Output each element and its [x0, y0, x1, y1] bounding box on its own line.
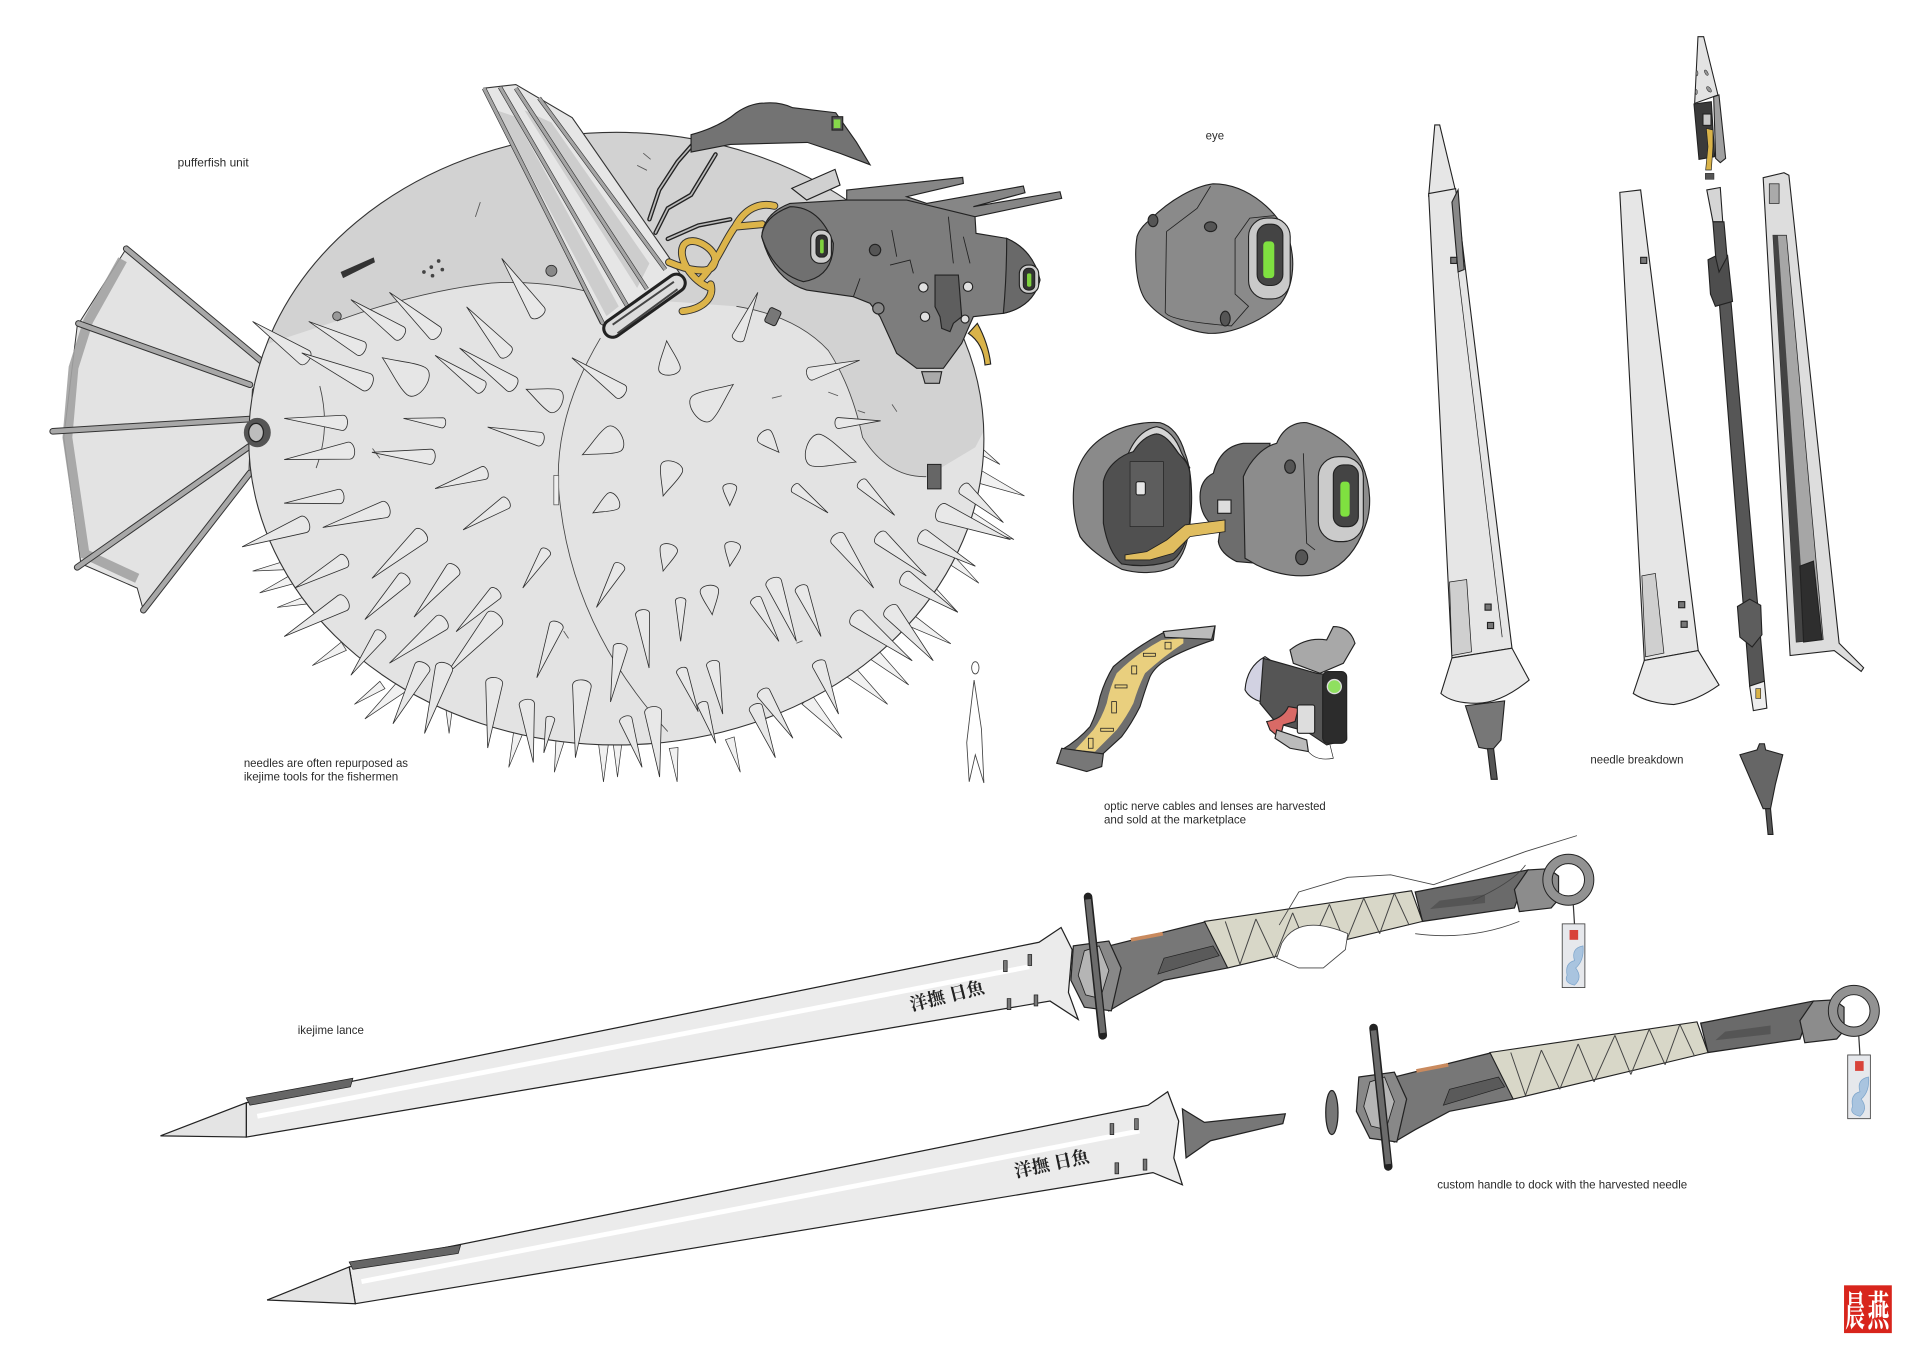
flex cable — [1057, 626, 1215, 772]
needle tip — [1695, 37, 1718, 103]
blade inscription: 洋撫 日魚 — [908, 977, 987, 1015]
main housing — [762, 200, 1040, 368]
lance handle assembled — [1071, 859, 1589, 1035]
gun barrels — [847, 177, 1062, 257]
label: pufferfish unit: pufferfish unit — [178, 158, 250, 170]
scale figure — [967, 662, 984, 783]
rim spikes behind body — [252, 450, 1027, 782]
second blade inscription: 洋撫 日魚 — [1012, 1146, 1092, 1181]
lens recess — [1257, 224, 1283, 285]
connector — [1465, 701, 1505, 750]
yellow cable — [1706, 128, 1713, 170]
white battery — [1297, 705, 1315, 733]
back housing — [1200, 443, 1270, 563]
lower yellow cable — [968, 323, 991, 365]
fish body — [248, 132, 984, 746]
wrap — [1204, 891, 1423, 968]
interior hole — [1136, 482, 1145, 495]
sheath dark strip — [1773, 235, 1806, 642]
casing — [1694, 102, 1715, 159]
fingers — [1277, 925, 1348, 968]
hand outline — [1277, 836, 1577, 968]
label: needle breakdown: needle breakdown — [1590, 754, 1684, 766]
needle tip assembly — [1694, 37, 1726, 179]
lower panel — [1449, 580, 1472, 656]
top connector — [1163, 626, 1215, 639]
cables — [649, 142, 774, 311]
left lens frame — [811, 230, 831, 263]
ring — [1548, 859, 1589, 901]
eye detail — [1136, 184, 1293, 333]
orange mark — [1131, 934, 1163, 940]
rear shaft — [1415, 870, 1528, 921]
blade highlight — [257, 967, 1029, 1116]
tip marks — [1695, 69, 1712, 95]
ribbon cable — [1125, 520, 1225, 560]
tip — [1429, 125, 1456, 196]
side bar — [1714, 95, 1726, 163]
cable end — [1705, 173, 1714, 179]
red part — [1267, 707, 1298, 738]
upper pod — [691, 103, 870, 165]
upper clamp — [1708, 256, 1733, 306]
disassembled eye and harvested parts — [1057, 422, 1370, 772]
lower vent — [922, 372, 942, 383]
interior socket — [1130, 462, 1163, 527]
tag cord — [1573, 904, 1574, 924]
label: eye: eye — [1206, 131, 1224, 143]
tag wave — [1566, 946, 1583, 985]
small lens module — [1245, 627, 1355, 759]
lower motor — [1275, 730, 1308, 752]
right lens — [1023, 268, 1035, 290]
pufferfish illustration — [53, 85, 1062, 783]
shaft slot — [1158, 946, 1219, 974]
rod end cap — [1750, 681, 1767, 711]
needle: sheath half — [1763, 173, 1864, 671]
shaft lower panel — [1642, 573, 1664, 657]
right green lens — [1340, 482, 1350, 517]
right ball lens frame — [1318, 457, 1363, 542]
holes — [1451, 257, 1494, 629]
tang — [1182, 1109, 1285, 1158]
shaft holes — [1641, 257, 1687, 627]
blade top slot — [246, 1078, 353, 1105]
top canister — [792, 169, 840, 200]
slots — [1003, 954, 1038, 1010]
sheath head — [1769, 184, 1779, 203]
flex cable yellow core — [1075, 638, 1183, 752]
right lens frame — [1019, 265, 1039, 293]
connector — [1218, 500, 1231, 513]
plug stem — [1766, 809, 1773, 834]
dorsal comb fin — [484, 85, 684, 336]
module lens panel — [1323, 672, 1347, 743]
second blade tip — [267, 1267, 355, 1304]
second lance blade — [267, 1092, 1285, 1304]
blade tip — [161, 1103, 246, 1137]
shaft flare — [1633, 651, 1719, 705]
washer — [1326, 1090, 1338, 1135]
sheath cutout — [1800, 561, 1822, 642]
tail fin — [53, 249, 267, 610]
chip marks — [1088, 642, 1171, 748]
collar highlight — [1078, 946, 1109, 999]
inner block — [1703, 114, 1711, 125]
needle: shaft only — [1620, 190, 1719, 705]
tag red seal — [1570, 930, 1578, 940]
collar — [1071, 941, 1121, 1011]
left lens hood — [762, 207, 833, 282]
right lens hood — [1003, 238, 1040, 313]
tag — [1562, 924, 1585, 988]
lance assembled blade — [161, 928, 1078, 1137]
label: needle repurposing note: ikejime tools for the fishermen — [244, 772, 398, 784]
label: harvest note: optic nerve cables and lenses are harvested — [1104, 801, 1326, 813]
label: harvest note: and sold at the marketplace — [1104, 814, 1246, 826]
left lens — [816, 235, 827, 257]
rod — [1713, 222, 1764, 686]
second blade top slot — [349, 1245, 461, 1269]
eye shell — [1136, 184, 1293, 333]
rear slot — [1430, 894, 1485, 909]
lower clamp — [1737, 599, 1762, 647]
flare — [1441, 648, 1529, 703]
right ball panel — [1303, 453, 1315, 550]
tail joint — [244, 418, 271, 447]
detached handle — [1356, 990, 1875, 1166]
seal left character: 晨 — [1845, 1289, 1865, 1335]
shaft side strip — [1452, 190, 1464, 272]
lower hand — [1415, 865, 1525, 936]
shaft — [1429, 189, 1512, 658]
plate bolts — [869, 244, 973, 323]
left shell — [1073, 422, 1192, 573]
right ball bolts — [1285, 460, 1308, 565]
artist seal — [1844, 1285, 1892, 1336]
spike — [1487, 749, 1497, 779]
upper pod green light — [832, 117, 843, 130]
right ball — [1243, 423, 1370, 576]
module green lens — [1327, 680, 1341, 694]
left lens green — [820, 239, 824, 253]
label: custom handle note: custom handle to dock with the harvested needle — [1437, 1180, 1687, 1192]
panel line — [1165, 186, 1274, 326]
needle: assembled — [1429, 125, 1529, 779]
center plate — [935, 275, 962, 332]
second blade slots — [1110, 1119, 1147, 1174]
bottom connector — [1057, 748, 1103, 772]
left shell interior — [1103, 434, 1190, 566]
sensor module with eyes — [691, 103, 1062, 383]
seal right character: 燕 — [1867, 1290, 1891, 1336]
green lens — [1263, 241, 1274, 278]
label: ikejime lance: ikejime lance — [298, 1025, 364, 1037]
lens frame — [1249, 218, 1290, 299]
handle shaft — [1109, 921, 1228, 1011]
panel lines — [853, 217, 970, 297]
bolts — [1148, 214, 1230, 326]
left shell rim — [1103, 427, 1190, 482]
second blade highlight — [361, 1131, 1140, 1282]
right lens green — [1027, 273, 1031, 287]
right lens recess — [1333, 465, 1358, 527]
connector — [1514, 869, 1559, 912]
needle plug — [1740, 744, 1783, 834]
wrap lines — [1225, 893, 1409, 964]
upper pod lens — [834, 119, 840, 128]
needle: inner rod — [1707, 187, 1767, 711]
guard bar — [1088, 897, 1103, 1035]
sheath channel — [1773, 235, 1823, 642]
label: needle repurposing note: needles are often repurposed as — [244, 758, 408, 770]
surface needles — [239, 254, 1014, 778]
